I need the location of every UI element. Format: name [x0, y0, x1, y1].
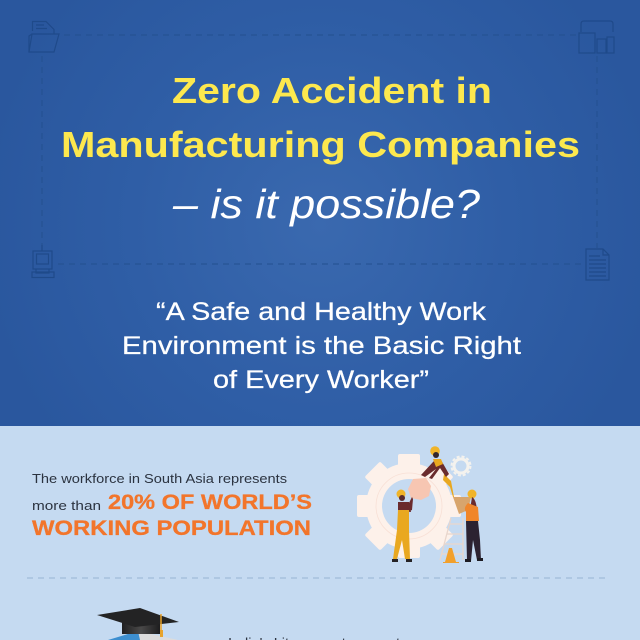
- quote: [122, 298, 521, 394]
- icon: robot computer: [32, 245, 54, 278]
- quote: “A Safe and Healthy Work: [156, 298, 487, 326]
- quote: of Every Worker”: [213, 366, 429, 394]
- icon: large gear: [357, 454, 461, 558]
- panel: light blue statistics background: [0, 426, 640, 640]
- worker: top: [421, 446, 454, 497]
- icon: ladder: [440, 518, 463, 560]
- icon: document: [586, 249, 609, 280]
- worker: right: [453, 490, 483, 562]
- title: Zero Accident in: [172, 70, 492, 111]
- text block: workforce statistic: 20% OF WORLD’S: [108, 491, 312, 514]
- quote: Environment is the Basic Right: [122, 332, 521, 360]
- icon: pink hexagon part: [408, 478, 431, 500]
- panel: blue header background: [0, 0, 640, 426]
- title: [61, 70, 580, 165]
- text block: workforce statistic: more than: [32, 498, 101, 513]
- worker: left: [392, 490, 413, 562]
- icon: traffic cone: [443, 548, 459, 563]
- icon: graduation cap on books: [97, 608, 179, 640]
- icon: folder: [29, 22, 59, 52]
- text block: workforce statistic: [32, 471, 312, 540]
- subtitle: – is it possible?: [172, 181, 480, 227]
- icon: small gear: [452, 456, 470, 476]
- text block: workforce statistic: WORKING POPULATION: [32, 517, 311, 540]
- icon: devices: [579, 21, 614, 53]
- title: Manufacturing Companies: [61, 124, 580, 165]
- text block: workforce statistic: The workforce in South Asia represents: [32, 471, 288, 486]
- illustration: workers with gear: [357, 446, 483, 563]
